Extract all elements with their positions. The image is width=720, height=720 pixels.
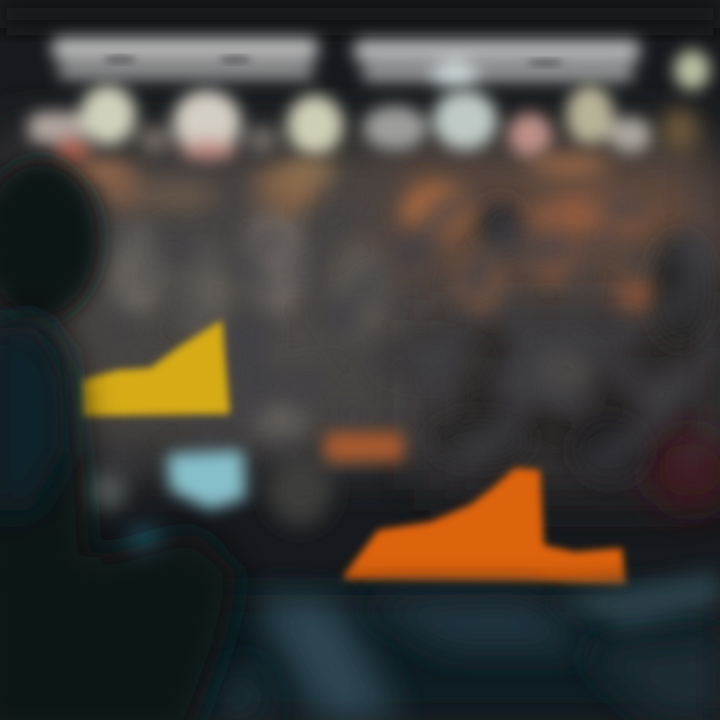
yellow area chart	[82, 320, 230, 416]
orange patches upper right	[99, 166, 653, 315]
orange area chart	[344, 468, 626, 586]
dark desk foreground with teal streaks	[0, 570, 720, 720]
silhouette of person	[0, 158, 240, 720]
pale blue screen	[167, 450, 246, 510]
glowing second row of labels	[28, 85, 652, 164]
bright corner light	[674, 50, 710, 90]
top heading band: right block	[354, 40, 640, 87]
glow lights under labels	[70, 108, 698, 182]
mottled texture overlay	[106, 180, 716, 473]
blurred chart texture	[85, 201, 712, 526]
small orange bar	[324, 432, 404, 462]
top heading band: left block	[52, 38, 318, 79]
teal small glow	[128, 527, 164, 563]
